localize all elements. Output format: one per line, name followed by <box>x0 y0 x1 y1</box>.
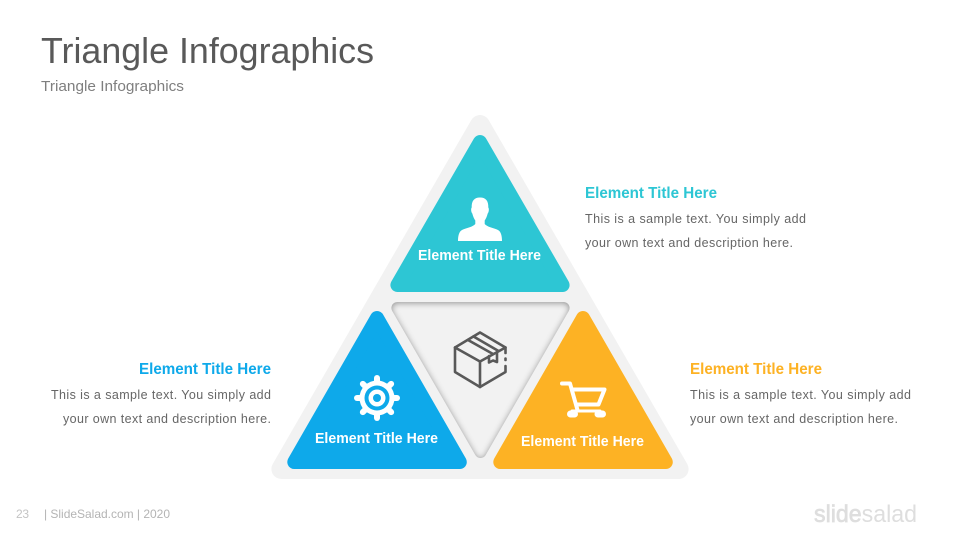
icon: gear <box>357 378 397 418</box>
outer light triangle <box>281 125 679 469</box>
text block: left element <box>51 361 271 426</box>
text block: right element: your own text and description here. <box>690 412 898 426</box>
icon: person <box>458 198 502 241</box>
text block: left element: This is a sample text. You simply add <box>51 388 271 402</box>
text block: right element: Element Title Here <box>690 361 822 378</box>
text block: right element: This is a sample text. You simply add <box>690 388 911 402</box>
text block: right element <box>690 361 911 426</box>
text block: top element: Element Title Here <box>585 185 717 202</box>
text block: top element: This is a sample text. You simply add <box>585 212 806 226</box>
right amber triangle <box>500 318 666 462</box>
top teal triangle <box>397 142 563 285</box>
logo: slidesalad: slidesalad <box>814 501 917 528</box>
text block: left element: Element Title Here <box>139 361 271 378</box>
title: Triangle Infographics <box>41 30 374 71</box>
icon: shopping cart <box>562 384 604 414</box>
subtitle: Triangle Infographics <box>41 78 184 95</box>
label: top triangle: Element Title Here <box>418 248 541 264</box>
text block: top element <box>585 185 806 250</box>
label: right triangle: Element Title Here <box>521 434 644 450</box>
text block: top element: your own text and description here. <box>585 236 793 250</box>
center inverted inset triangle <box>397 308 564 452</box>
footer: source: | SlideSalad.com | 2020 <box>44 507 170 521</box>
footer: page number: 23 <box>16 507 29 521</box>
panel: triangle diagram <box>281 125 679 469</box>
text block: left element: your own text and description here. <box>63 412 271 426</box>
icon: box <box>455 332 506 387</box>
left blue triangle <box>294 318 460 462</box>
label: left triangle: Element Title Here <box>315 431 438 447</box>
